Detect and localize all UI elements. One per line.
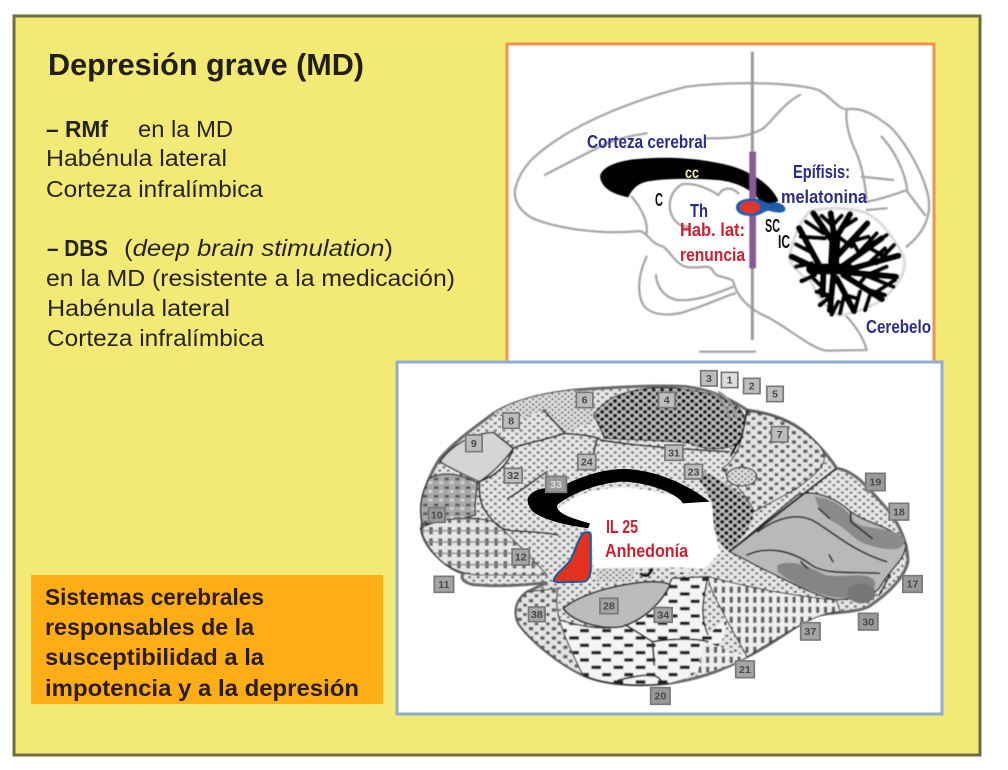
text block: RMf: en la MD [138,116,233,142]
text block: DBS: Corteza infralímbica [47,325,264,351]
label: pineal melatonin: Epífisis: [793,162,850,182]
area number tags: 19 [869,478,882,488]
text block: DBS: – DBS [47,235,108,261]
area number tags: 10 [431,511,443,522]
area number tags: 34 [657,611,669,622]
label: pineal melatonin [781,162,868,207]
cortical area map [420,371,922,704]
label: SC: SC [765,216,780,236]
area number tags: 30 [862,618,874,628]
upper frontal fine dots [494,390,604,433]
stimulation electrode [749,152,756,268]
area number tags: 12 [515,553,527,564]
parietal [722,412,824,512]
area number tags: 31 [668,449,680,459]
frontal pole [421,474,477,525]
area number tags: 11 [438,580,450,591]
callout: brain systems: responsables de la [45,614,254,640]
area number tags: 2 [749,382,755,392]
area number tags: 8 [508,417,514,427]
area number tags: 7 [777,430,783,441]
area number tags: 9 [471,439,477,450]
cerebellum [789,208,904,316]
area number tags: 32 [507,471,519,482]
label: lateral habenula: renuncia [680,245,746,265]
label: lateral habenula: Hab. lat: [680,220,745,240]
infralimbic area 25 [554,532,591,582]
silhouette [422,386,908,685]
title: Depresión grave (MD) [48,47,364,82]
corpus callosum black [527,469,710,528]
area number tags: 5 [772,390,778,401]
area number tags: 18 [893,508,905,518]
cingulate lines [479,410,729,535]
label: Anhedonía: Anhedonía [605,541,689,561]
text block: RMf: Habénula lateral [46,145,227,171]
callout: brain systems: Sistemas cerebrales [45,584,264,610]
area number tags: 3 [706,374,712,385]
panel: sagittal monkey brain [507,44,934,366]
area number tags: 24 [581,458,593,469]
area number tags [429,371,922,704]
text block: DBS: Habénula lateral [47,295,230,321]
frontal pale region [440,432,513,482]
area number tags: 33 [550,480,562,491]
callout: brain systems: susceptibilidad a la [45,644,264,670]
parahippocampal [563,582,670,627]
area number tags: 37 [804,627,817,638]
text block: DBS: en la MD (resistente a la medicación) [46,265,455,291]
corpus callosum [600,158,778,205]
label: cc: cc [685,165,699,182]
label: IC: IC [778,232,790,252]
motor dense dots [594,388,745,449]
area number tags: 4 [664,396,670,407]
area number tags: 28 [603,602,615,613]
inferior temporal dashes [554,577,711,685]
occipital region [729,493,906,600]
area number tags: 21 [739,665,751,676]
area number tags: 17 [907,580,919,591]
text block: DBS: (deep brain stimulation ) [124,235,393,261]
brain outline drawing [515,52,929,352]
area number tags: 38 [531,610,543,621]
text block: RMf: Corteza infralímbica [46,176,263,202]
area number tags: 6 [582,396,588,407]
text block: RMf [46,116,263,202]
label: Th: Th [690,201,708,221]
label: pineal melatonin: melatonina [781,187,868,207]
callout: brain systems: impotencia y a la depresión [45,675,359,701]
label: Corteza cerebral: Corteza cerebral [587,132,707,152]
label: Cerebelo: Cerebelo [866,317,931,337]
label: IL 25: IL 25 [606,517,638,537]
label: C: C [655,190,663,210]
area number tags: 20 [654,692,667,703]
callout: brain systems [31,575,383,704]
text block: DBS [46,235,455,351]
area number tags: 23 [688,468,700,478]
temporal pole [516,588,583,675]
lateral habenula [740,201,760,213]
white core [558,488,720,568]
label: lateral habenula [680,220,746,265]
area number tags: 1 [727,376,733,387]
pineal gland [736,198,785,216]
vertical plane line [748,52,757,340]
panel: human medial brain map [397,362,942,714]
text block: RMf: – RMf [46,116,108,142]
